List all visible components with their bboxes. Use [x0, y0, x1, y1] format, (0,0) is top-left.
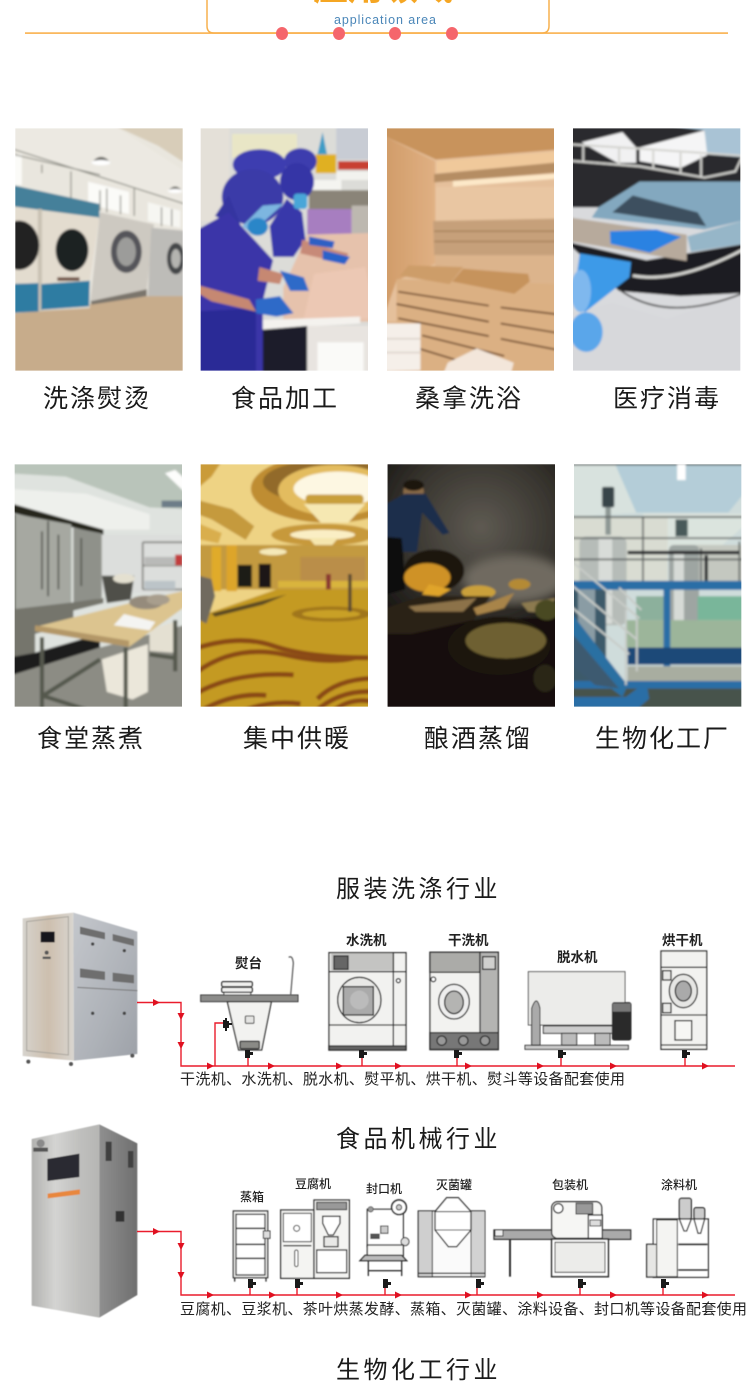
- valves: [248, 1279, 669, 1288]
- caption: heating: 集中供暖: [243, 725, 351, 753]
- valves: [223, 1018, 690, 1058]
- caption: medical: 医疗消毒: [613, 385, 721, 413]
- caption: laundry: 洗涤熨烫: [43, 385, 151, 413]
- heading: english subtitle: application area: [334, 13, 436, 27]
- caption: canteen: 食堂蒸煮: [37, 725, 145, 753]
- pipeline: laundry: [137, 999, 735, 1070]
- flow arrows: [153, 999, 709, 1070]
- photo: medical sterilising: [573, 128, 740, 371]
- label: spin dryer: 脱水机: [557, 949, 598, 965]
- ironing table: [201, 957, 298, 1050]
- note: food equipment list: 豆腐机、豆浆机、茶叶烘蒸发酵、蒸箱、灭菌罐、涂料设备、封口机等设备配套使用: [180, 1300, 747, 1318]
- photo: bio-chemical plant: [574, 464, 742, 707]
- packaging machine: [494, 1202, 631, 1277]
- header: application area: [25, 0, 728, 40]
- caption: food processing: 食品加工: [231, 385, 339, 413]
- photo: central heating hall: [200, 464, 368, 707]
- photo: distillery: [388, 464, 555, 707]
- pipeline: food: [137, 1228, 735, 1298]
- spin dryer: [525, 972, 631, 1049]
- steam generator: laundry: [23, 913, 137, 1066]
- sterilising tank: [418, 1198, 485, 1277]
- tumble dryer: [661, 951, 707, 1049]
- note: laundry equipment list: 干洗机、水洗机、脱水机、熨平机、烘干机、熨斗等设备配套使用: [180, 1070, 625, 1088]
- label: coating machine: 涂料机: [661, 1177, 697, 1192]
- label: sterilising tank: 灭菌罐: [436, 1177, 472, 1192]
- steam generator: food: [32, 1124, 137, 1318]
- divider line with dots: [25, 27, 728, 40]
- caption: bio-chemical: 生物化工厂: [595, 725, 730, 753]
- tofu machine: [281, 1200, 349, 1278]
- photo: laundry room: [15, 128, 183, 371]
- caption: sauna: 桑拿洗浴: [415, 385, 523, 413]
- photo: sauna: [387, 128, 554, 371]
- steamer cabinet: [233, 1211, 270, 1282]
- label: washer: 水洗机: [346, 932, 387, 948]
- washer: [329, 953, 406, 1050]
- section heading: bio-chemical: 生物化工行业: [336, 1357, 501, 1384]
- photo: canteen kitchen: [14, 464, 182, 707]
- label: tofu machine: 豆腐机: [295, 1176, 331, 1191]
- label: tumble dryer: 烘干机: [662, 932, 703, 948]
- heading frame: [207, 0, 549, 33]
- caption: distillery: 酿酒蒸馏: [424, 725, 532, 753]
- coating machine: [647, 1198, 708, 1277]
- label: ironing table: 熨台: [235, 955, 262, 971]
- label: steamer: 蒸箱: [240, 1189, 264, 1204]
- sealing machine: [360, 1200, 409, 1276]
- label: sealing machine: 封口机: [366, 1182, 402, 1196]
- section heading: garment laundry: 服装洗涤行业: [336, 876, 501, 903]
- dry cleaner: [430, 952, 498, 1050]
- photo: food processing: [200, 128, 368, 371]
- flow arrows: [153, 1228, 709, 1298]
- label: dry cleaner: 干洗机: [448, 932, 489, 948]
- label: packaging machine: 包装机: [552, 1177, 588, 1192]
- section heading: food machinery: 食品机械行业: [336, 1126, 501, 1153]
